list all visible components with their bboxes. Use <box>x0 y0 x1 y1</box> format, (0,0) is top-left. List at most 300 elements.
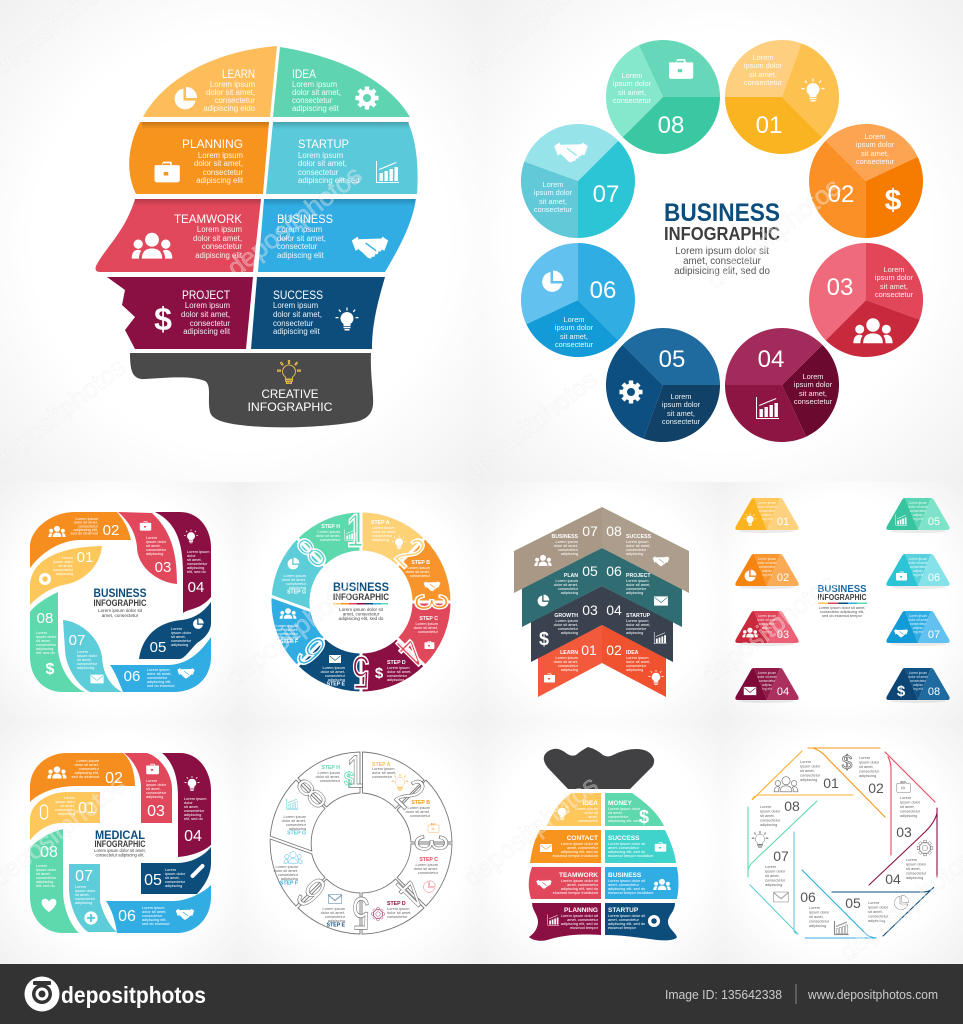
segment 08: elit, sed do <box>36 883 55 888</box>
bag cell: contact: adipiscing elit, sed do <box>561 849 598 854</box>
octagon text: adipiscing <box>765 882 782 887</box>
bag cell: success <box>605 830 676 863</box>
image id: Image ID: 135642338 <box>665 988 782 1002</box>
watermarks: depositphotos <box>695 567 841 691</box>
segment 04: sit amet, <box>187 557 202 562</box>
head segment: teamwork: adipiscing elit <box>195 251 243 260</box>
ring digits: 3 <box>405 593 456 611</box>
outline step labels: Lorem ipsum <box>387 906 410 911</box>
step labels: dolor sit amet, <box>372 529 396 534</box>
head segment: project: adipiscing elit <box>183 327 231 336</box>
tab body text: dolor sit amet <box>908 505 928 509</box>
icon: dollar: $ <box>46 661 55 678</box>
head segment: teamwork: consectetur <box>202 242 242 251</box>
icon: pie <box>193 618 204 629</box>
bag cell: teamwork: Lorem ipsum dolor sit <box>561 878 599 883</box>
ring segments <box>270 511 452 693</box>
outline step labels: Lorem ipsum <box>322 906 345 911</box>
segment 03: consectetur <box>146 547 167 552</box>
segment 04: adipiscing <box>187 565 204 570</box>
icon: handshake <box>653 556 669 566</box>
octagon text: consectetur <box>760 818 781 822</box>
octagon lines <box>748 748 937 938</box>
tab 07 <box>886 611 950 646</box>
segment 02: sed do eiusmod <box>71 531 98 536</box>
segment 06: Lorem ipsum <box>147 667 170 672</box>
octagon text: Lorem <box>760 804 771 809</box>
arrow: dark slate: STARTUP <box>626 613 651 619</box>
arrow: dark slate: GROWTH <box>554 613 578 619</box>
bag cell: startup: STARTUP <box>608 907 639 914</box>
head segment: planning: PLANNING <box>182 137 243 151</box>
octagon numbers: 03 <box>896 824 912 840</box>
icon: people <box>47 766 67 778</box>
icon: handshake <box>554 142 588 163</box>
segment 03: ipsum dolor <box>146 782 167 787</box>
head segment: startup: Lorem ipsum <box>298 151 343 160</box>
tab 08: $ <box>897 683 906 700</box>
arrow: red: dolor sit amet, <box>626 659 650 664</box>
ring digits: 8 <box>288 529 336 577</box>
outline ring digits: 2 <box>386 770 434 818</box>
step labels: Lorem ipsum <box>387 665 410 670</box>
head segment: business <box>258 199 416 272</box>
watermarks: depositphotos <box>220 569 366 693</box>
heading: MEDICAL <box>95 828 145 842</box>
circle 01: 01 <box>756 112 782 139</box>
circle 01: consectetur <box>744 78 783 87</box>
heading <box>333 580 389 621</box>
icon: dollar: $ <box>539 629 549 649</box>
head segment: project: Lorem ipsum <box>185 301 230 310</box>
segment 04: sit amet, <box>184 804 199 809</box>
octagon text: consectetur <box>765 878 786 882</box>
segment 01: consectetur <box>53 567 74 572</box>
segment 02: Lorem ipsum <box>76 516 98 521</box>
heading: business infographic <box>664 199 780 277</box>
icon: thermometer <box>190 863 205 879</box>
segment 01: ipsum dolor <box>53 559 74 564</box>
divider <box>796 984 797 1004</box>
outline step labels: Lorem ipsum <box>372 766 394 771</box>
head segment: neck with creative infographic: INFOGRAPHIC <box>248 400 333 414</box>
segment 04: elit, sed do <box>184 816 203 821</box>
bag cell: startup: adipiscing elit, sed do <box>608 921 645 926</box>
icon: bulb <box>555 805 569 820</box>
watermarks: depositphotos <box>221 159 367 283</box>
step labels: consectetur <box>320 537 341 542</box>
segment 06: adipiscing elit, <box>147 679 171 684</box>
tab 03 <box>735 611 799 646</box>
tab body text: Lorem ipsum <box>909 501 928 505</box>
head segment: learn: dolor sit amet, <box>206 88 255 97</box>
octagon text: consectetur <box>900 808 921 814</box>
tab body text: adipisc <box>913 683 923 687</box>
segment 06: 06 <box>124 668 140 685</box>
bag cell: idea <box>547 793 601 826</box>
head segment: idea <box>273 47 410 117</box>
arrow: dark slate <box>531 586 673 662</box>
website: www.depositphotos.com <box>807 988 938 1002</box>
step labels: Lorem ipsum <box>322 665 345 670</box>
icon: dollar: $ <box>154 301 172 337</box>
octagon text: adipiscing <box>868 918 885 923</box>
tab body text: Lorem ipsum <box>909 614 928 618</box>
icon: bulb <box>802 78 824 102</box>
tab body text: consectetur <box>759 622 776 626</box>
octagon text: sit amet, <box>906 866 921 871</box>
head segment: success: consectetur <box>273 319 314 328</box>
outline step labels: dolor sit amet, <box>387 910 411 915</box>
octagon text: Lorem <box>765 864 776 869</box>
arrow: red: dolor sit amet, <box>554 659 578 664</box>
circle 05 <box>606 328 720 442</box>
tab body text: adipisc <box>762 626 772 630</box>
octagon text: adipiscing <box>906 875 923 880</box>
tab body text: consectetur <box>759 509 776 513</box>
arrow: teal: adipiscing <box>561 590 578 595</box>
arrow: red <box>538 625 666 697</box>
head segment: business: Lorem ipsum <box>277 225 322 234</box>
segment 01: 01 <box>77 549 93 566</box>
tab body text: consectetur <box>910 509 927 513</box>
segment 05: adipiscing <box>171 642 188 647</box>
bag cell: planning: amet, consectetur <box>567 917 599 922</box>
step labels: Lorem ipsum <box>408 565 430 570</box>
bag cell: money: MONEY <box>608 800 632 807</box>
circle 06: 06 <box>590 277 616 304</box>
step labels: STEP E <box>327 682 346 688</box>
bag cell: business: amet, consectetur <box>608 882 640 887</box>
octagon text: consectetur <box>859 768 880 774</box>
heading: amet, consectetur <box>343 612 380 616</box>
segment 07: adipiscing <box>77 665 94 670</box>
segment 04: dolor <box>184 800 193 805</box>
tab body text <box>757 501 928 691</box>
circle 03: ipsum dolor <box>875 273 914 282</box>
bag cell: idea: IDEA <box>582 800 598 807</box>
outline step labels: STEP D <box>387 901 406 907</box>
segment 02: 02 <box>105 770 123 787</box>
bag cell: teamwork: adipiscing elit, sed do <box>561 886 598 891</box>
arrow: dark slate: adipiscing <box>626 630 643 635</box>
segment 03: adipiscing <box>146 551 163 556</box>
segment 01: 01 <box>78 800 96 817</box>
outline step labels: dolor sit amet, <box>372 770 396 775</box>
head segment: neck with creative infographic <box>130 353 373 427</box>
circle 01: sit amet, <box>749 70 777 79</box>
arrow: red: adipiscing <box>626 667 643 672</box>
arrow: tan: BUSINESS <box>551 534 579 540</box>
outline step labels: STEP H <box>321 765 340 771</box>
head segment: teamwork <box>96 199 261 272</box>
bag cell: teamwork: amet, consectetur <box>567 882 599 887</box>
heading: Lorem ipsum dolor sit amet, <box>94 848 146 853</box>
bag cell: startup <box>605 903 677 940</box>
icon: pie <box>175 87 197 109</box>
panel: stacked arrows <box>514 507 689 697</box>
arrow: dark slate: consectetur <box>626 626 647 631</box>
segment 05: Lorem <box>165 867 176 872</box>
heading: business infographic: BUSINESS <box>664 199 780 227</box>
segment 04: 04 <box>188 579 204 596</box>
head segment: idea: adipiscing elit <box>292 104 340 113</box>
tab body text: adipisc <box>762 513 772 517</box>
icon: mail <box>654 596 668 606</box>
segment 03: Lorem <box>146 778 157 783</box>
octagon text <box>760 755 927 928</box>
segment 02 <box>30 753 135 802</box>
segment 02 <box>30 512 131 568</box>
ring digits: 5 <box>352 646 370 697</box>
circle 03: 03 <box>827 274 853 301</box>
bag cell: success: SUCCESS <box>608 835 640 842</box>
segment 07: 07 <box>69 632 85 649</box>
head segment: learn: adipiscing eldo <box>203 104 256 113</box>
bag cell: success: eiusmod tempor incididunt <box>608 853 654 858</box>
bag cell: teamwork: TEAMWORK <box>559 872 598 879</box>
heading: INFOGRAPHIC <box>94 598 147 608</box>
icon: people <box>653 879 671 890</box>
segment 06 <box>110 637 211 692</box>
segment 05 <box>139 602 211 659</box>
segment 01: Lorem <box>64 795 75 800</box>
outline ring digits: 1 <box>346 747 364 798</box>
arrow: tan: Lorem ipsum <box>626 539 648 544</box>
circle 07: 07 <box>593 181 619 208</box>
step labels: Lorem ipsum <box>276 623 298 628</box>
bag cell: teamwork: eiusmod tempor incididunt <box>553 890 599 895</box>
step labels: Lorem ipsum <box>416 621 438 626</box>
head segment: idea: IDEA <box>292 67 316 81</box>
segment 05: sit amet, <box>165 875 180 880</box>
tab 04 <box>735 668 799 703</box>
octagon text: Lorem <box>868 900 879 905</box>
icon: bulb <box>649 670 663 685</box>
circle 01 <box>725 40 839 154</box>
step labels: adipiscing <box>289 585 306 590</box>
arrow: red: consectetur <box>626 663 647 668</box>
head segment: startup <box>266 122 418 194</box>
segment 08: elit, sed do <box>36 650 55 655</box>
step labels: STEP F <box>280 639 298 645</box>
heading: INFOGRAPHIC <box>94 839 146 849</box>
circle 04: Lorem <box>803 372 823 381</box>
circle 06: Lorem <box>564 315 584 324</box>
octagon text: ipsum dolor <box>900 800 921 804</box>
bag cell: planning: PLANNING <box>564 907 598 914</box>
bag cell: contact: CONTACT <box>567 835 598 842</box>
tab body text: consectetur <box>910 679 927 683</box>
panel: rounded medical swirl <box>30 753 211 933</box>
icon: chart <box>756 397 779 419</box>
heading: amet, consectetur <box>102 613 139 618</box>
segment 06: dolor sit amet, <box>147 671 171 676</box>
arrow: red: Lorem ipsum <box>626 655 648 660</box>
step labels: STEP B <box>411 560 430 566</box>
segment 07: ipsum dolor <box>75 888 96 893</box>
tab body text: Lorem ipsum <box>758 501 777 505</box>
heading: business infographic: amet, consectetur <box>683 256 762 267</box>
arrow: teal: dolor sit amet, <box>554 582 578 587</box>
tab 04: 04 <box>777 686 789 698</box>
arrow: tan: consectetur <box>558 547 579 552</box>
segment 06 <box>106 885 211 933</box>
segment 07: sit amet, <box>75 892 90 897</box>
ring digits: 1 <box>346 506 364 557</box>
step labels: adipiscing <box>328 677 345 682</box>
head segment: business: adipiscing elit <box>277 251 325 260</box>
arrow: tan: SUCCESS <box>626 534 652 540</box>
footer bar <box>0 964 963 1024</box>
circle 06: sit amet, <box>560 332 588 341</box>
outline step labels: Lorem ipsum <box>284 814 306 819</box>
tab 07: 07 <box>928 629 940 641</box>
bag cell: contact: eiusmod tempor incididunt <box>553 853 599 858</box>
step labels: consectetur <box>278 631 299 636</box>
panel: eight circles <box>497 16 947 466</box>
tab 03: 03 <box>777 629 789 641</box>
icon: briefcase <box>140 521 151 531</box>
octagon text: ipsum dolor <box>800 764 821 768</box>
tab 06: 06 <box>928 572 940 584</box>
segment 02: dolor sit amet, <box>75 762 99 767</box>
circle 03: consectetur <box>875 290 914 299</box>
segment 07: Lorem <box>77 649 88 654</box>
segment 06: adipiscing elit, <box>142 917 166 922</box>
ring icons <box>280 530 440 682</box>
step labels: adipiscing <box>281 635 298 640</box>
head segment: success: SUCCESS <box>273 288 323 302</box>
arrow: dark slate: 03 <box>582 602 598 618</box>
circle 04: sit amet, <box>799 389 827 398</box>
segment 01: adipiscing <box>56 571 73 576</box>
arrow: dark slate: dolor sit amet, <box>554 622 578 627</box>
segment 03: sit amet, <box>146 786 161 791</box>
arrow: tan: Lorem ipsum <box>556 539 578 544</box>
segment 02: sed do eiusmod <box>72 774 99 779</box>
bag cell: idea: dolor sit <box>584 810 599 815</box>
arrow: red: adipiscing <box>561 667 578 672</box>
segment 08: Lorem <box>36 863 47 868</box>
panel: outline numbered ring <box>270 747 456 938</box>
segment 06: Lorem ipsum <box>142 905 164 910</box>
octagon numbers: 06 <box>800 889 816 905</box>
head segment: startup: dolor sit amet, <box>298 159 347 168</box>
icon: handshake <box>177 668 195 679</box>
step labels: dolor sit amet, <box>282 577 306 582</box>
icon: chart <box>548 914 559 926</box>
arrow: teal: PROJECT <box>626 573 651 579</box>
tab body text: ing elit <box>762 687 772 691</box>
tab 01 <box>735 498 799 533</box>
outline step labels: STEP F <box>280 880 298 886</box>
icon: people <box>534 555 552 566</box>
tab body text: dolor sit amet <box>908 618 928 622</box>
tab body text: ing elit <box>913 517 923 521</box>
arrow: teal: consectetur <box>558 586 579 591</box>
heading: INFOGRAPHIC <box>818 593 867 602</box>
icon: people <box>48 526 66 537</box>
outline step labels: STEP G <box>287 830 306 836</box>
octagon text: consectetur <box>906 870 927 876</box>
tab 06 <box>886 554 950 589</box>
bag cell: business: Lorem ipsum dolor sit <box>608 878 646 883</box>
circle 08: Lorem <box>622 71 642 80</box>
octagon numbers: 04 <box>885 871 901 887</box>
circle 02: Lorem <box>865 132 885 141</box>
segment 06: dolor sit amet, <box>142 909 166 914</box>
panel: eight triangle tabs <box>735 498 950 703</box>
segment 06: sed do eiusmod <box>147 683 174 688</box>
head segment: project: dolor sit amet, <box>181 310 230 319</box>
segment 08: ipsum dolor <box>36 634 57 639</box>
circle 07: ipsum dolor <box>534 188 573 197</box>
head segment: startup: STARTUP <box>298 137 349 151</box>
segment 07: consectetur <box>75 896 96 901</box>
outline step labels: STEP C <box>419 857 438 863</box>
step labels: STEP A <box>371 520 390 526</box>
segment 07: ipsum dolor <box>77 653 98 658</box>
head segment: success: Lorem ipsum <box>273 301 318 310</box>
outline step labels: adipiscing <box>281 876 298 881</box>
segment 08: sit amet, <box>36 871 51 876</box>
tab body text: ing elit <box>913 573 923 577</box>
circle 02: sit amet, <box>861 149 889 158</box>
circle 05: sit amet, <box>667 409 695 418</box>
head segment: learn <box>143 46 277 117</box>
tab body text: dolor sit amet <box>908 675 928 679</box>
head segment: neck with creative infographic: CREATIVE <box>262 387 318 401</box>
outline step labels: Lorem ipsum <box>318 770 340 775</box>
outline step labels: consectetur <box>278 872 299 877</box>
segment 05: ipsum dolor <box>171 630 192 635</box>
arrow: red: 02 <box>606 642 622 658</box>
bag cell: planning: Lorem ipsum dolor sit <box>561 913 599 918</box>
octagon text: adipiscing <box>760 822 777 827</box>
bag cell: startup: amet, consectetur <box>608 917 640 922</box>
segment 08: sit amet, <box>36 638 51 643</box>
head segment: learn: Lorem ipsum <box>210 80 255 89</box>
circle 04 <box>701 304 863 466</box>
segment 02: Lorem ipsum <box>76 758 99 763</box>
heading: business infographic: adipisicing elit, sed do <box>674 266 770 277</box>
segment 08: consectetur <box>36 642 57 647</box>
bag cell: success: Lorem ipsum dolor sit <box>608 841 646 846</box>
arrow: teal: adipiscing <box>626 590 643 595</box>
segment 03 <box>118 512 177 584</box>
arrow: red: Lorem ipsum <box>556 655 578 660</box>
segment 01: sit amet, <box>58 563 73 568</box>
icon: handshake <box>176 909 194 920</box>
arrow: teal <box>522 548 682 627</box>
tab body text: Lorem ipsum <box>758 614 777 618</box>
arrow: dark slate: dolor sit amet, <box>626 622 650 627</box>
icon: pie <box>542 270 564 292</box>
tab body text: Lorem ipsum <box>758 671 777 675</box>
heading: INFOGRAPHIC <box>333 592 389 602</box>
segment 05: ipsum dolor <box>165 871 186 876</box>
bag cell: planning: adipiscing elit, sed do <box>561 921 598 926</box>
segment 08: adipiscing <box>36 646 53 651</box>
step labels: STEP C <box>419 616 438 622</box>
segment 02: consectetur <box>79 766 100 771</box>
icon: dollar: $ <box>639 807 649 827</box>
heading: business infographic: Lorem ipsum dolor sit <box>675 246 769 257</box>
arrow: dark slate: Lorem ipsum <box>556 618 578 623</box>
step labels: STEP H <box>321 524 340 530</box>
icon: mail <box>540 844 552 852</box>
